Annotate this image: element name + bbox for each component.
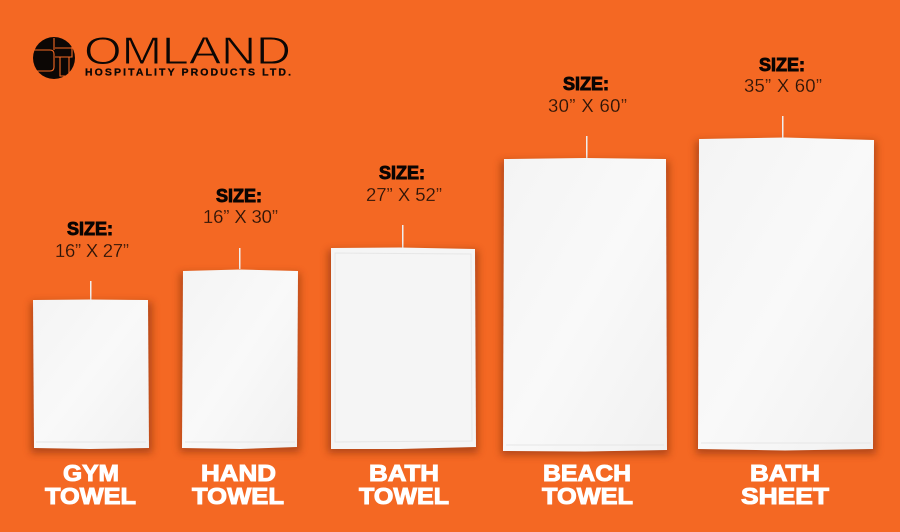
towel name: BATH [369, 460, 439, 486]
size label: SIZE: [216, 186, 262, 206]
logo emblem [33, 37, 75, 79]
towel name: GYM [63, 460, 119, 486]
towel name: BATH [750, 460, 820, 486]
towel [698, 138, 874, 450]
dimensions: 35” X 60” [744, 75, 822, 96]
logo tagline: HOSPITALITY PRODUCTS LTD. [85, 66, 291, 78]
towel column: bath sheet: SHEET [741, 483, 829, 509]
towel [503, 158, 667, 452]
dimensions: 16” X 30” [203, 206, 278, 227]
size label: SIZE: [563, 74, 609, 94]
logo wordmark: OMLAND [84, 30, 291, 73]
size label: SIZE: [67, 219, 113, 239]
dimensions: 16” X 27” [55, 240, 129, 261]
towel shadow [31, 302, 152, 453]
hanger [90, 281, 92, 300]
towel name: BEACH [543, 460, 631, 486]
towel shadow [328, 250, 478, 453]
towel column: bath sheet [696, 55, 876, 509]
towel column: gym towel: TOWEL [45, 483, 136, 509]
towel column: bath towel [328, 163, 478, 509]
towel [331, 248, 476, 449]
hanger [782, 116, 784, 138]
towel name: HAND [201, 460, 276, 486]
hanger [402, 225, 404, 248]
towel column: beach towel [501, 74, 669, 509]
towel shadow [180, 273, 300, 452]
dimensions: 30” X 60” [548, 95, 627, 116]
hanger [586, 136, 588, 159]
towel column: hand towel [180, 186, 300, 509]
size label: SIZE: [379, 163, 425, 183]
towel shadow [501, 161, 669, 455]
towel column: bath towel: TOWEL [359, 483, 449, 509]
towel column: beach towel: TOWEL [542, 483, 633, 509]
towel [33, 300, 149, 449]
size label: SIZE: [759, 55, 805, 75]
hanger [239, 248, 240, 269]
dimensions: 27” X 52” [366, 184, 442, 205]
logo [33, 30, 291, 79]
towel shadow [696, 141, 876, 454]
towel column: hand towel: TOWEL [192, 483, 284, 509]
towel column: gym towel [31, 219, 152, 509]
towel [182, 270, 298, 449]
